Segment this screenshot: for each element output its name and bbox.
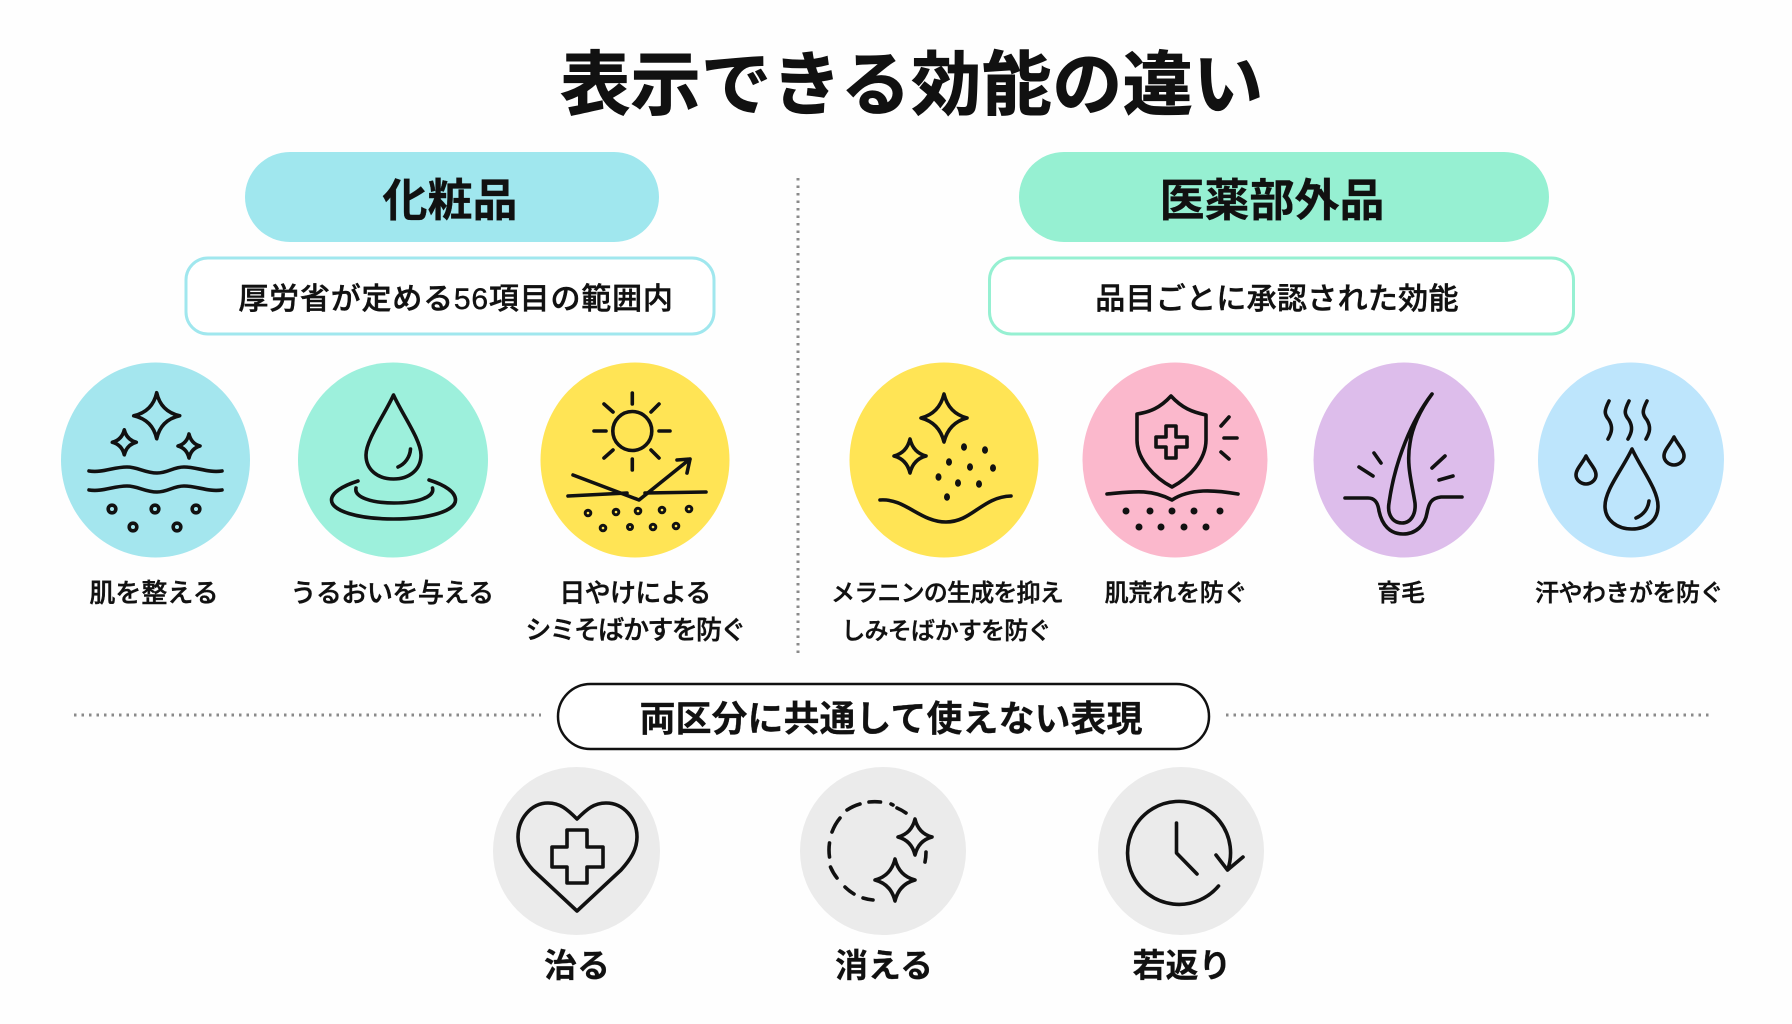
item: moisturising <box>290 362 494 608</box>
icon: hair follicle <box>1314 362 1494 558</box>
label: 治る <box>544 947 610 984</box>
icon: dashed circle with sparkles <box>800 767 966 935</box>
subheading box: cosmetics <box>186 258 714 334</box>
label: 日やけによる <box>559 578 711 608</box>
icon: clock with reverse arrow <box>1098 767 1264 935</box>
label: 肌荒れを防ぐ <box>1105 580 1247 607</box>
section heading pill <box>558 684 1209 749</box>
label: 汗やわきがを防ぐ <box>1535 580 1723 607</box>
heading pill: cosmetics: 化粧品 <box>382 175 518 226</box>
item: sweat and odour prevention <box>1535 362 1724 607</box>
panel: prohibited expressions <box>74 684 1710 984</box>
item: cure <box>493 767 660 984</box>
label: うるおいを与える <box>290 578 494 608</box>
icon: water drop with ripples <box>298 362 488 558</box>
item: rough skin prevention <box>1082 362 1268 607</box>
label: 肌を整える <box>89 578 219 608</box>
section rule right <box>1226 714 1710 716</box>
icon: sparkles over skin <box>61 362 250 558</box>
heading pill: cosmetics <box>245 152 659 242</box>
heading pill: quasi-drugs <box>1019 152 1549 242</box>
label: 消える <box>835 947 933 984</box>
label: メラニンの生成を抑え <box>831 580 1063 607</box>
title: 表示できる効能の違い <box>560 46 1264 124</box>
label: シミそばかすを防ぐ <box>525 615 745 645</box>
section rule left <box>74 714 541 716</box>
item: rejuvenation <box>1098 767 1264 984</box>
item: sun protection <box>525 362 745 645</box>
label <box>525 578 745 645</box>
panel: quasi-drugs <box>831 152 1724 645</box>
icon: sun and reflected ray <box>540 362 730 558</box>
subheading box: quasi-drugs: 品目ごとに承認された効能 <box>1095 283 1459 316</box>
icon: steam and droplets <box>1538 362 1724 558</box>
icon: shield with cross <box>1082 362 1268 558</box>
panel: cosmetics <box>61 152 745 645</box>
label: 育毛 <box>1377 580 1425 607</box>
subheading box: cosmetics: 厚労省が定める56項目の範囲内 <box>238 283 674 316</box>
subheading box: quasi-drugs <box>990 258 1574 334</box>
label <box>831 580 1063 645</box>
label: 若返り <box>1132 947 1232 984</box>
item: hair growth <box>1314 362 1494 607</box>
item: melanin suppression <box>831 362 1063 645</box>
item: disappear <box>800 767 966 984</box>
icon: sparkles and spots <box>850 362 1038 558</box>
icon: heart with cross <box>493 767 660 935</box>
item: skin conditioning <box>61 362 250 608</box>
section heading pill: 両区分に共通して使えない表現 <box>640 698 1142 739</box>
heading pill: quasi-drugs: 医薬部外品 <box>1159 175 1385 226</box>
label: しみそばかすを防ぐ <box>841 618 1051 645</box>
vertical divider <box>796 178 800 654</box>
